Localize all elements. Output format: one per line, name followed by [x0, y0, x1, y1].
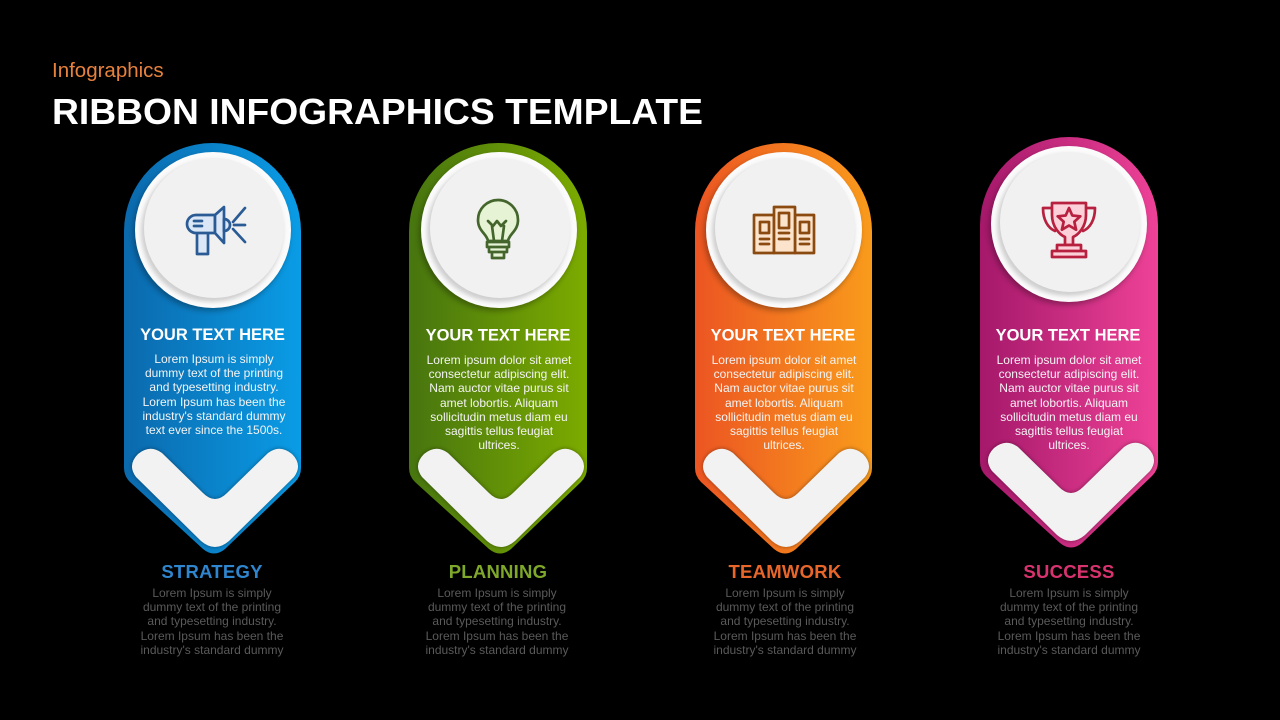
caption: strategy: Lorem Ipsum is simply [152, 586, 272, 600]
body text: consectetur adipiscing elit. [714, 367, 854, 381]
body text: ultrices. [763, 438, 805, 452]
caption: planning: PLANNING [449, 561, 547, 582]
caption: strategy: and typesetting industry. [147, 614, 277, 628]
body text: Lorem ipsum dolor sit amet [712, 353, 857, 367]
eyebrow label: Infographics [52, 59, 164, 82]
icon: megaphone [187, 207, 245, 254]
caption: teamwork: industry's standard dummy [713, 643, 857, 657]
body text: Lorem ipsum dolor sit amet [997, 353, 1142, 367]
ribbon shape [409, 143, 587, 554]
body text: dummy text of the printing [145, 366, 283, 380]
icon: trophy [1043, 203, 1095, 257]
caption: success: Lorem Ipsum is simply [1009, 586, 1129, 600]
caption: success: SUCCESS [1023, 561, 1115, 582]
body text: Lorem Ipsum is simply [154, 352, 274, 366]
chevron [418, 449, 584, 547]
body text: text ever since the 1500s. [146, 423, 282, 437]
body text: Lorem Ipsum has been the [143, 395, 286, 409]
icon: light bulb [478, 200, 518, 258]
medallion [133, 152, 291, 311]
caption: planning: and typesetting industry. [432, 614, 562, 628]
heading: YOUR TEXT HERE [711, 326, 855, 344]
caption: planning: dummy text of the printing [428, 600, 566, 614]
icon: books [754, 207, 814, 253]
panel: teamwork ribbon [695, 143, 872, 554]
caption: strategy: Lorem Ipsum has been the [141, 629, 284, 643]
body text: amet lobortis. Aliquam [1010, 396, 1128, 410]
caption: teamwork: TEAMWORK [729, 561, 842, 582]
body text: sagittis tellus feugiat [445, 424, 554, 438]
ribbon shape [695, 143, 872, 554]
medallion [704, 152, 862, 311]
body text: amet lobortis. Aliquam [440, 396, 558, 410]
heading: YOUR TEXT HERE [426, 326, 570, 344]
body text: amet lobortis. Aliquam [725, 396, 843, 410]
caption: success: industry's standard dummy [997, 643, 1141, 657]
caption: strategy: industry's standard dummy [140, 643, 284, 657]
caption: success: dummy text of the printing [1000, 600, 1138, 614]
caption: teamwork [713, 561, 857, 657]
caption: planning: Lorem Ipsum has been the [426, 629, 569, 643]
body text: sollicitudin metus diam eu [1000, 410, 1138, 424]
body text: consectetur adipiscing elit. [999, 367, 1139, 381]
medallion [419, 152, 577, 311]
ribbon shape [124, 143, 301, 554]
body text: Nam auctor vitae purus sit [429, 381, 569, 395]
caption: strategy: STRATEGY [161, 561, 263, 582]
heading: YOUR TEXT HERE [996, 326, 1140, 344]
body text: industry's standard dummy [142, 409, 286, 423]
caption: teamwork: Lorem Ipsum has been the [714, 629, 857, 643]
body text: Nam auctor vitae purus sit [714, 381, 854, 395]
body text: sollicitudin metus diam eu [715, 410, 853, 424]
body text: Lorem ipsum dolor sit amet [427, 353, 572, 367]
medallion [989, 146, 1147, 305]
caption: teamwork: and typesetting industry. [720, 614, 850, 628]
caption: strategy: dummy text of the printing [143, 600, 281, 614]
ribbon shape [980, 137, 1158, 547]
caption: teamwork: dummy text of the printing [716, 600, 854, 614]
body text: sagittis tellus feugiat [730, 424, 839, 438]
panel: planning ribbon [409, 143, 587, 554]
body text: and typesetting industry. [149, 380, 279, 394]
body text: ultrices. [478, 438, 520, 452]
chevron [703, 449, 869, 547]
panel: success ribbon [980, 137, 1158, 547]
body text: Nam auctor vitae purus sit [999, 381, 1139, 395]
chevron [988, 443, 1154, 541]
body text: sollicitudin metus diam eu [430, 410, 568, 424]
body text: consectetur adipiscing elit. [429, 367, 569, 381]
caption: success: Lorem Ipsum has been the [998, 629, 1141, 643]
title: RIBBON INFOGRAPHICS TEMPLATE [52, 91, 703, 132]
heading: YOUR TEXT HERE [140, 326, 285, 344]
body text: sagittis tellus feugiat [1015, 424, 1124, 438]
caption: teamwork: Lorem Ipsum is simply [725, 586, 845, 600]
body text: ultrices. [1048, 438, 1090, 452]
caption: planning: Lorem Ipsum is simply [437, 586, 557, 600]
caption: success [997, 561, 1141, 657]
caption: success: and typesetting industry. [1004, 614, 1134, 628]
caption: strategy [140, 561, 284, 657]
chevron [132, 449, 298, 547]
caption: planning: industry's standard dummy [425, 643, 569, 657]
panel: strategy ribbon [124, 143, 301, 554]
caption: planning [425, 561, 569, 657]
